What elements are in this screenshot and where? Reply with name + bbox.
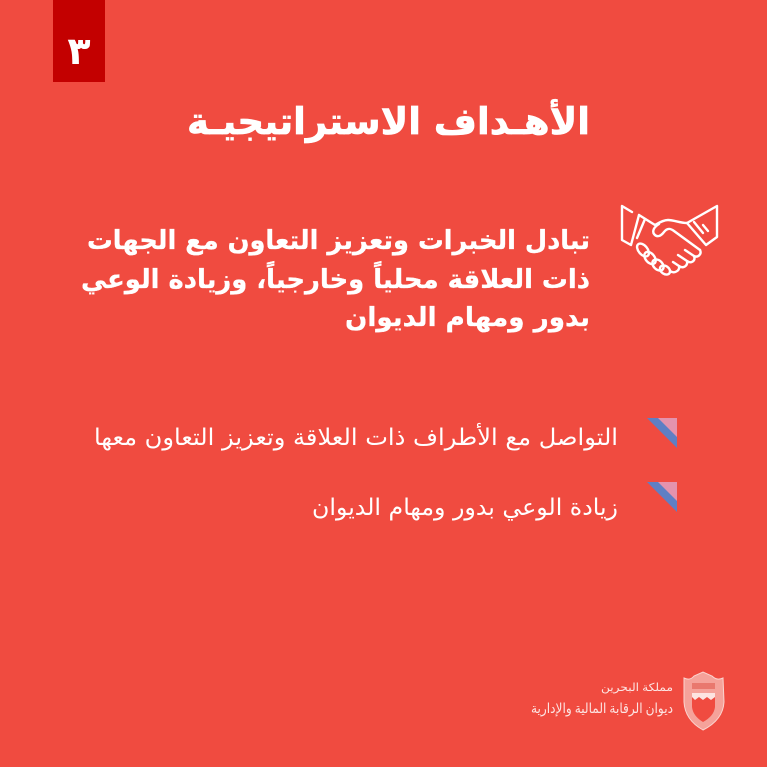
number badge: ٣: [67, 29, 91, 73]
main statement text: بدور ومهام الديوان: [345, 303, 590, 333]
number badge: [53, 0, 105, 82]
main statement text: ذات العلاقة محلياً وخارجياً، وزيادة الوعي: [81, 260, 590, 295]
main statement text: [81, 226, 590, 333]
icon: handshake: [622, 206, 717, 276]
title: الأهـداف الاستراتيجيـة: [187, 98, 590, 143]
icon: bullet triangle 2: [647, 482, 677, 512]
icon: bullet triangle 1: [647, 418, 677, 448]
logo emblem: [684, 672, 724, 730]
logo: [531, 672, 724, 730]
bullet 2: زيادة الوعي بدور ومهام الديوان: [312, 495, 618, 521]
logo wordmark: مملكة البحرين: [601, 682, 673, 694]
logo wordmark: ديوان الرقابة المالية والإدارية: [531, 702, 673, 717]
bullet 1: [94, 418, 677, 451]
bullet 2: [312, 482, 677, 521]
logo wordmark: [531, 682, 673, 717]
bullet 1: التواصل مع الأطراف ذات العلاقة وتعزيز التعاون معها: [94, 423, 618, 451]
main statement text: تبادل الخبرات وتعزيز التعاون مع الجهات: [87, 226, 590, 256]
